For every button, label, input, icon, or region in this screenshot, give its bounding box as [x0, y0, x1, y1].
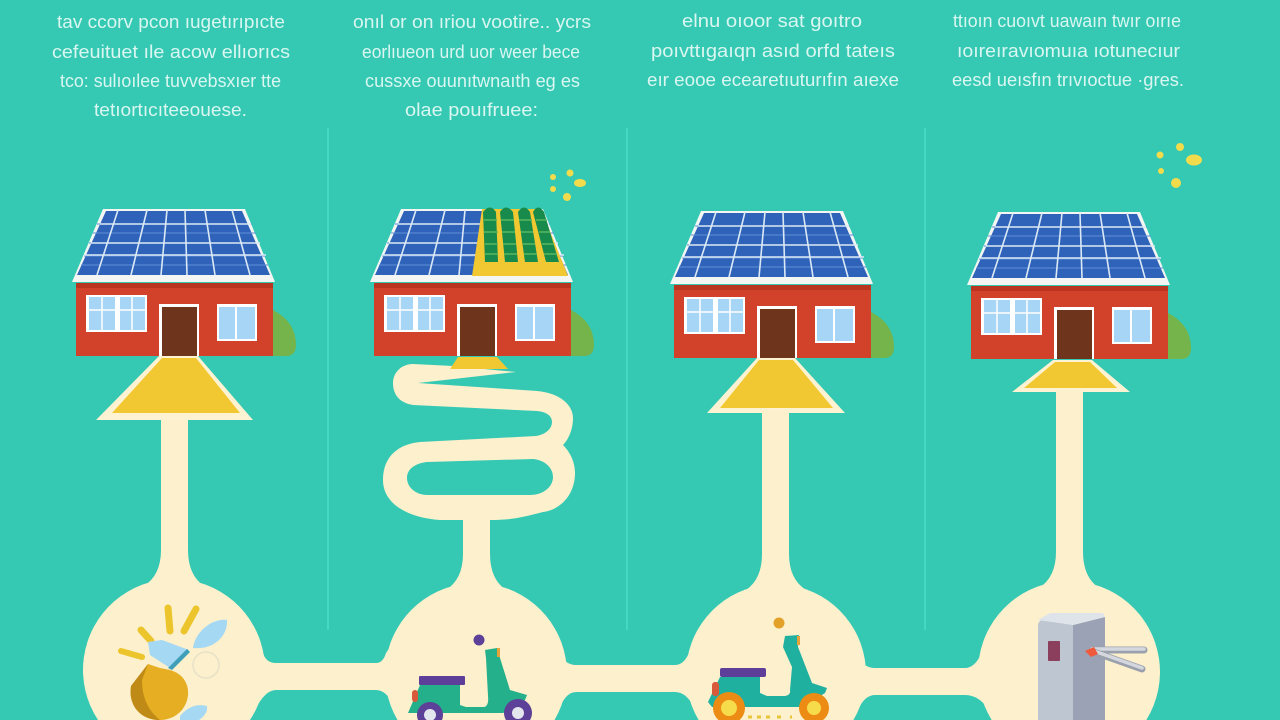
text block: column 4: eesd ueısfın trıvıoctue ·gres. — [952, 69, 1184, 90]
walkway 2 — [450, 357, 508, 369]
text block: column 4: ttıoın cuoıvt uawaın twır oırıe — [953, 10, 1181, 31]
text block: column 2: olae pouıfruee: — [405, 99, 538, 120]
text block: column 1: tav ccorv pcon ıugetırıpıcte — [57, 11, 285, 32]
winding path from house 2 — [383, 357, 575, 520]
icon: light bulb with rays and leaves — [121, 608, 227, 720]
text block: column 3 — [647, 10, 899, 90]
text block: column 1: tco: sulıoılee tuvvebsxıer tte — [60, 70, 281, 91]
house 3 with solar roof — [670, 211, 894, 413]
text block: column 2: cussxe ouunıtwnaıth eg es — [365, 70, 580, 91]
cream path network with circles — [83, 390, 1160, 720]
text block: column 1: tetıortıcıteeouese. — [94, 99, 247, 120]
yellow sparkle dots — [1156, 143, 1202, 188]
walkway 1 — [96, 356, 253, 420]
icon: purple-wheel scooter — [408, 634, 532, 720]
text block: column 4: ıoıreıravıomuıa ıotunecıur — [957, 40, 1180, 61]
text block: column 2: eorlıueon urd uor weer bece — [362, 41, 580, 62]
text block: column 2 — [353, 11, 591, 120]
house 4 with solar roof — [967, 143, 1202, 392]
yellow sparkle dots — [550, 170, 586, 201]
house 1 with solar roof — [72, 209, 296, 420]
green roof section — [472, 208, 568, 276]
house 2 with solar and green roof — [370, 170, 594, 356]
text block: column 1: cefeuituet ıle acow ellıorıcs — [52, 41, 290, 62]
walkway 3 — [707, 358, 845, 413]
walkway 4 — [1012, 360, 1130, 392]
text block: column 1 — [52, 11, 290, 120]
column dividers — [328, 128, 925, 630]
text block: column 3: eır eooe ecearetıuturıfın aıexe — [647, 69, 899, 90]
icon: orange-wheel scooter — [708, 618, 829, 720]
text block: column 2: onıl or on ıriou vootire.. ycrs — [353, 11, 591, 32]
icon: turnstile gate — [1038, 613, 1144, 720]
text block: column 3: elnu oıoor sat goıtro — [682, 10, 862, 31]
text block: column 4 — [952, 10, 1184, 90]
text block: column 3: poıvttıgaıqn asıd orfd tateıs — [651, 40, 895, 61]
